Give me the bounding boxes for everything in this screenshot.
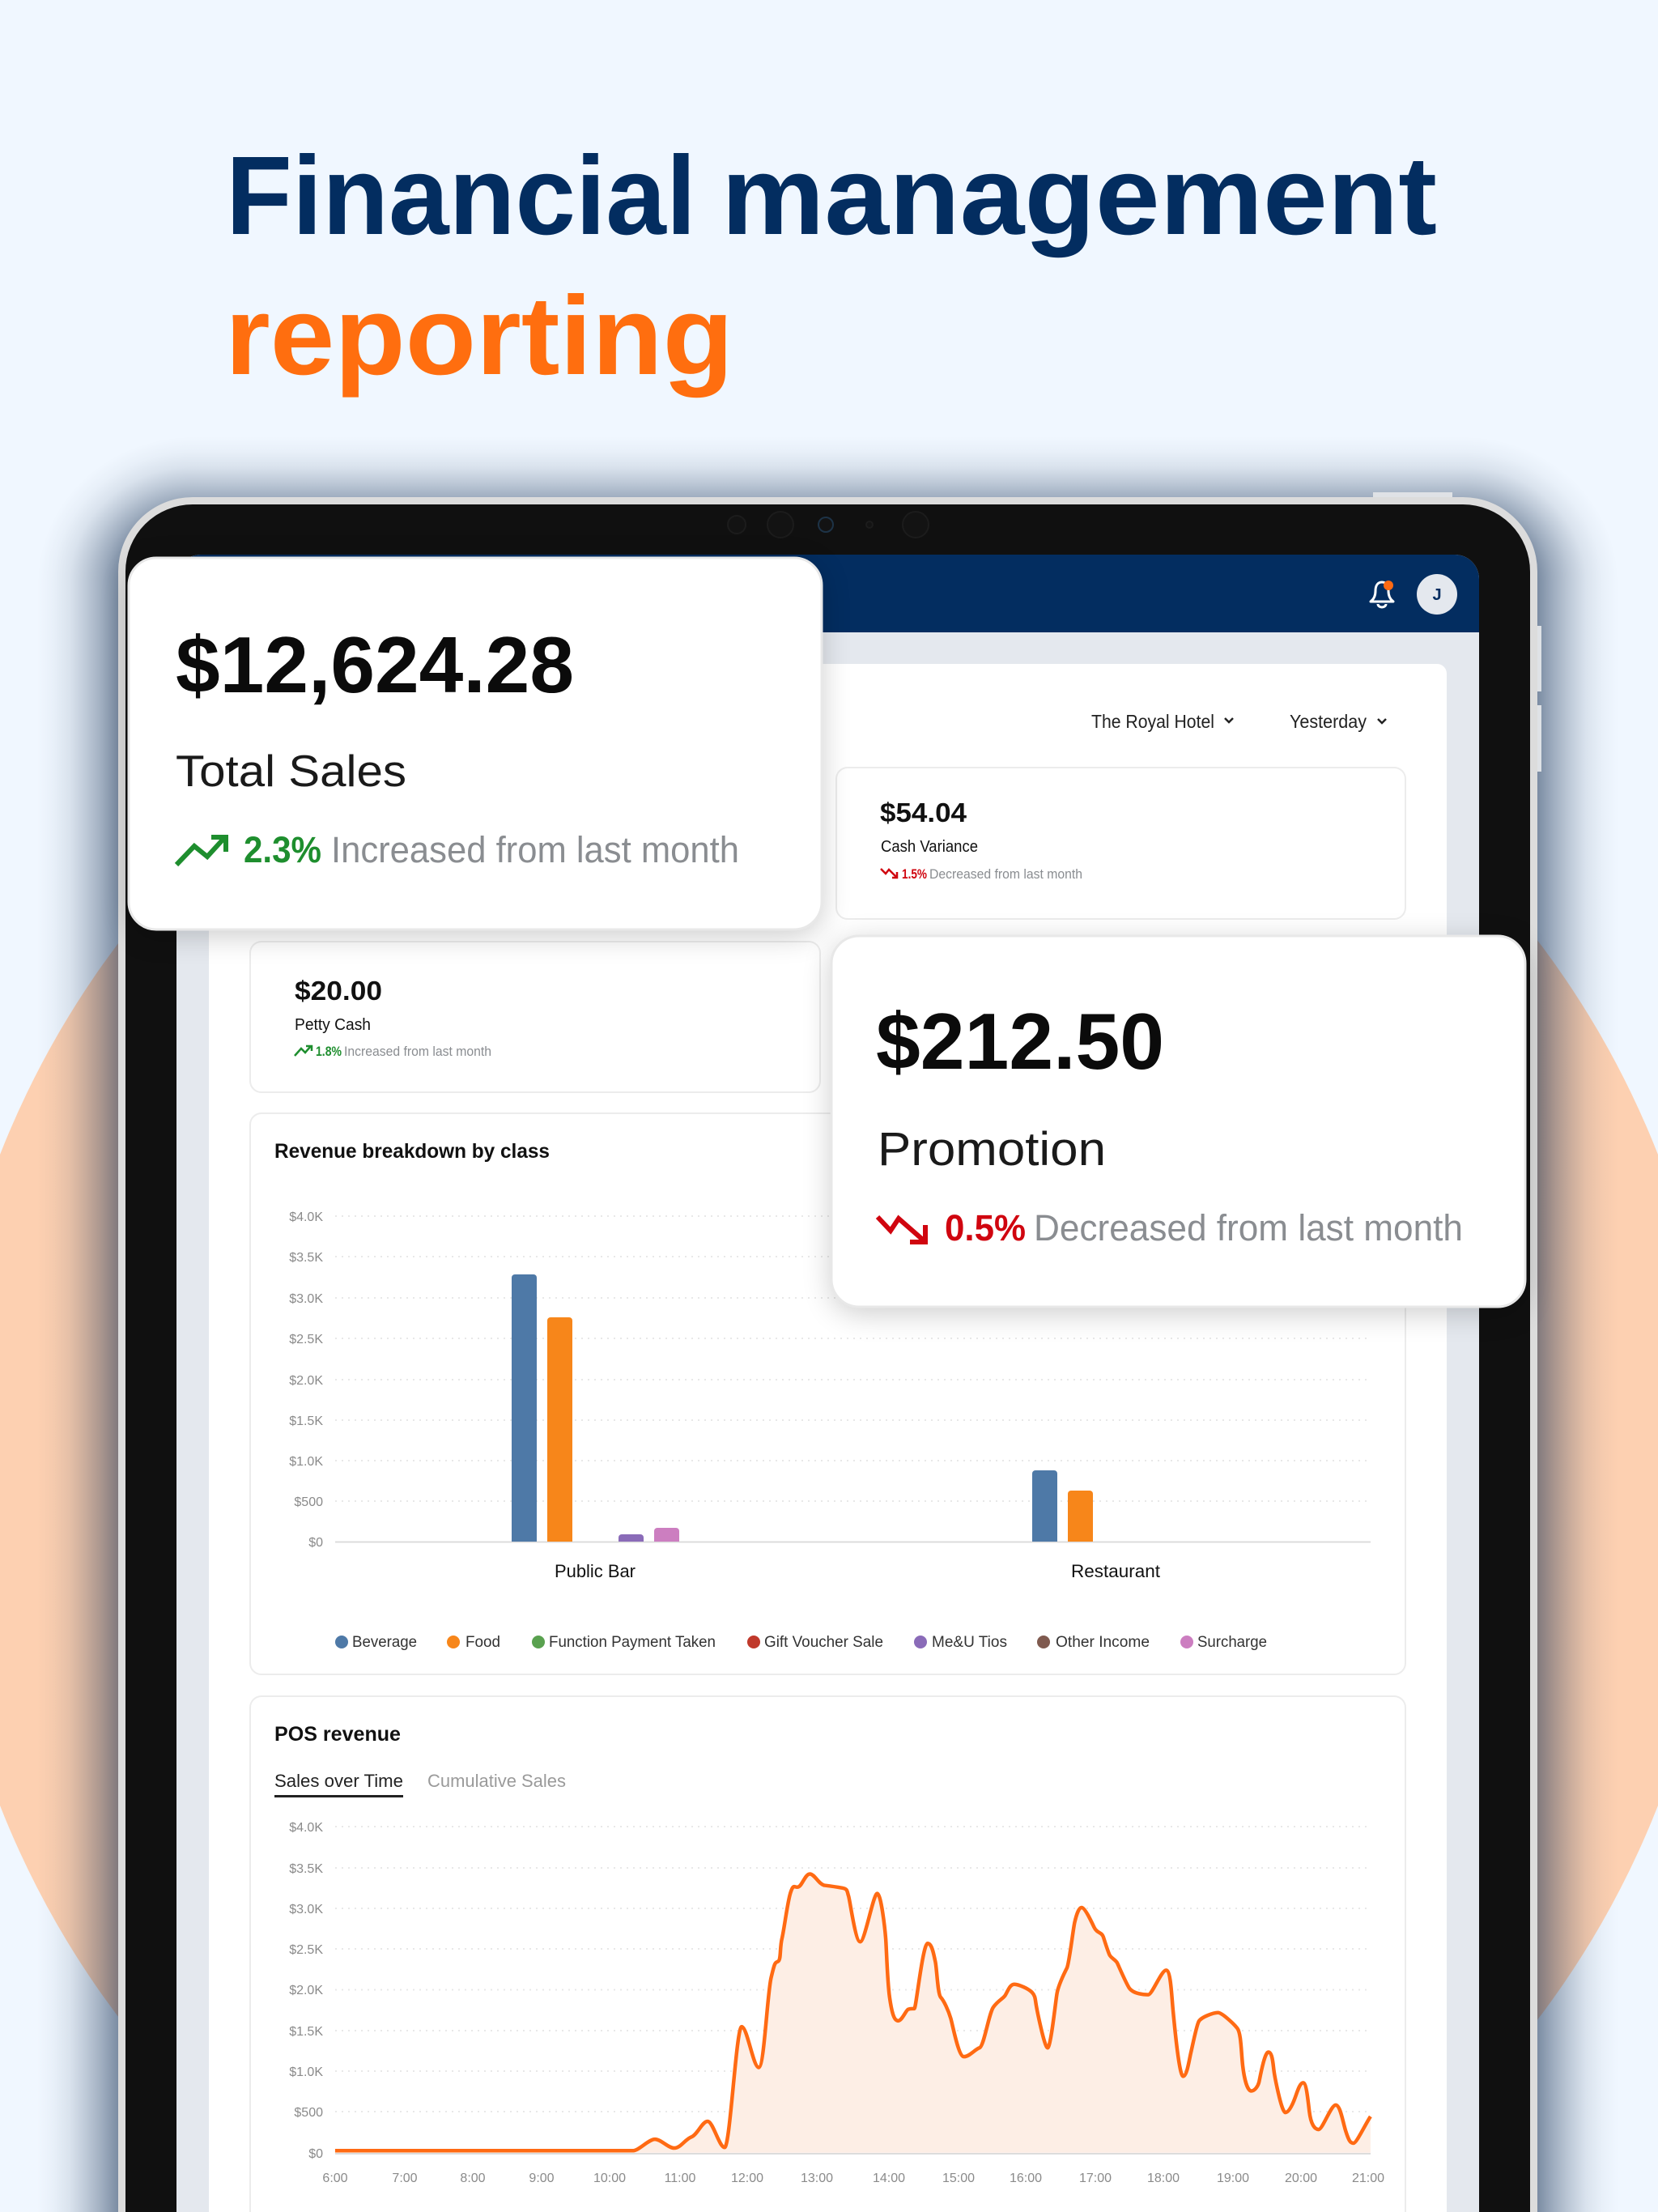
card: cash variance: 1.5% [902,866,927,882]
line chart y axis labels: $1.0K [289,2065,323,2079]
icon: green up trend arrow [176,837,226,865]
callout card: total sales [129,558,822,936]
chart legend: Beverage [352,1634,417,1651]
card: petty cash: $20.00 [295,976,382,1006]
title: Financial [226,134,696,258]
bar chart axis labels: $2.5K [289,1333,323,1346]
line chart x axis labels: 9:00 [529,2172,555,2185]
promotion change percent: 0.5% [945,1207,1026,1249]
line chart x axis labels: 18:00 [1147,2172,1180,2185]
line chart x axis labels: 10:00 [593,2172,626,2185]
line chart x axis labels: 17:00 [1079,2172,1112,2185]
bar chart axis labels: $3.0K [289,1292,323,1306]
promotion change note: Decreased from last month [1034,1207,1463,1249]
icon: notification bell [1371,581,1393,607]
screen background [176,555,1479,2212]
tab: sales over time: Sales over Time [274,1771,403,1791]
title: reporting [225,274,733,398]
line chart y axis labels: $2.0K [289,1984,323,1997]
bar chart axis labels [289,1210,323,1550]
line chart x axis labels: 15:00 [942,2172,975,2185]
line chart y axis labels: $4.0K [289,1821,323,1835]
filter: venue dropdown: The Royal Hotel [1091,711,1214,732]
promotion label: Promotion [878,1123,1106,1176]
title [225,134,1437,398]
chart legend: Gift Voucher Sale [764,1634,883,1651]
bar chart category labels: Restaurant [1071,1561,1160,1581]
panel: POS revenue [250,1696,1405,2212]
tablet side buttons [1373,492,1541,772]
card: petty cash [250,942,820,1092]
icon: small down trend [881,869,897,878]
chart legend: Food [466,1634,500,1651]
top navigation bar [176,555,1479,632]
bar chart axis labels: $1.5K [289,1414,323,1428]
heading: revenue breakdown: Revenue breakdown by class [274,1140,550,1163]
card: cash variance: Cash Variance [881,838,978,856]
card: cash variance: $54.04 [880,798,967,827]
line chart x axis labels: 6:00 [322,2172,348,2185]
promotion amount: $212.50 [876,997,1164,1086]
tablet frame [118,497,1537,2212]
total sales change note: Increased from last month [331,829,739,870]
title: management [721,134,1437,258]
background peach circle [0,589,1658,2212]
bar chart axis labels: $0 [308,1536,323,1550]
tablet device [118,492,1541,2212]
line chart x axis labels: 21:00 [1352,2172,1384,2185]
bar chart axis labels: $4.0K [289,1210,323,1224]
line chart y axis labels: $500 [294,2106,323,2120]
front cameras [728,512,929,538]
icon: small up trend [295,1046,312,1056]
card: petty cash: 1.8% [316,1044,342,1059]
card: cash variance: Decreased from last month [929,866,1082,882]
chart legend [335,1634,1267,1651]
line chart y axis labels: $3.0K [289,1903,323,1916]
user avatar [1417,574,1457,615]
line chart y axis labels [289,1821,323,2161]
bar chart axis labels: $500 [294,1495,323,1509]
line chart y axis labels: $2.5K [289,1943,323,1957]
line chart x axis labels: 19:00 [1217,2172,1249,2185]
chart legend: Function Payment Taken [549,1634,716,1651]
line chart y axis labels: $1.5K [289,2025,323,2039]
chart legend: Surcharge [1197,1634,1267,1651]
bar chart axis labels: $2.0K [289,1374,323,1388]
panel: revenue breakdown by class [250,1113,1405,1674]
line chart x axis labels: 11:00 [665,2172,696,2185]
line chart x axis labels: 12:00 [731,2172,763,2185]
total sales change percent: 2.3% [244,829,321,870]
line chart x axis labels: 16:00 [1010,2172,1042,2185]
bar chart axis labels: $3.5K [289,1251,323,1265]
tablet bezel [125,504,1530,2212]
total sales label: Total Sales [176,746,406,796]
chart legend: Me&U Tios [932,1634,1007,1651]
total sales amount: $12,624.28 [176,620,574,709]
line chart x axis labels: 13:00 [801,2172,833,2185]
bar chart axis labels: $1.0K [289,1455,323,1469]
card: cash variance [836,768,1405,919]
callout card: promotion [831,936,1527,1313]
bar chart category labels [555,1561,1160,1581]
chart legend: Other Income [1056,1634,1150,1651]
line chart x axis labels: 20:00 [1285,2172,1317,2185]
heading: POS revenue: POS revenue [274,1723,401,1746]
tab: cumulative sales: Cumulative Sales [427,1771,566,1791]
white content panel [209,664,1447,2212]
line chart x axis labels: 8:00 [460,2172,486,2185]
icon: red down trend arrow [878,1217,925,1242]
card: petty cash: Petty Cash [295,1016,371,1034]
line chart x axis labels: 7:00 [392,2172,418,2185]
line chart y axis labels: $0 [308,2147,323,2161]
bar chart bars [512,1274,1093,1542]
line chart x axis labels [322,2172,1384,2185]
line chart y axis labels: $3.5K [289,1862,323,1876]
filter: date dropdown: Yesterday [1290,711,1367,732]
tablet shadow [37,436,1618,2212]
card: petty cash: Increased from last month [344,1044,491,1059]
bar chart category labels: Public Bar [555,1561,636,1581]
user avatar: J [1432,586,1442,604]
line chart x axis labels: 14:00 [873,2172,905,2185]
line chart: sales over time [335,1874,1371,2153]
